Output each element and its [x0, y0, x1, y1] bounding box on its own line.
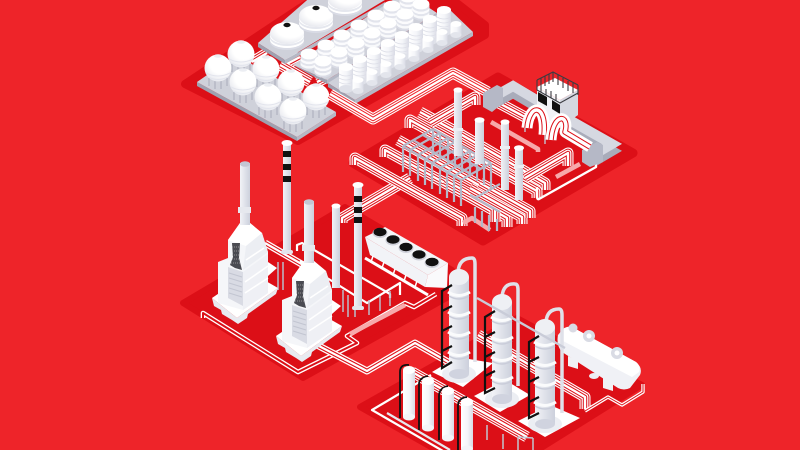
- furnace platform pipes: [203, 243, 450, 372]
- panel: furnace platform: [183, 207, 452, 378]
- air cooler: [365, 227, 448, 295]
- plate: large domed tanks: [258, 0, 385, 64]
- column platform pipes: [372, 335, 643, 450]
- gray connector between towers: [477, 298, 565, 348]
- gray stands under curved pipes: [525, 117, 555, 144]
- plate: cylinders: [328, 6, 473, 104]
- panel: process unit platform: [353, 77, 633, 241]
- panel: column platform: [360, 318, 642, 450]
- plate: medium tanks: [293, 0, 437, 84]
- column tower 3: [528, 309, 562, 433]
- column tower 2: [485, 284, 519, 408]
- horizontal vessel: [558, 324, 641, 391]
- chimney: plain: [332, 204, 340, 288]
- furnace 1: [212, 161, 278, 324]
- panel: storage tank platform: [185, 0, 485, 141]
- pipe rack: [403, 129, 500, 231]
- building: [537, 72, 578, 128]
- furnace 2: [276, 199, 342, 362]
- stacks: [453, 87, 524, 200]
- ducts and control building: [483, 72, 612, 167]
- column tower 1: [442, 258, 476, 383]
- chimney: striped left: [278, 140, 293, 290]
- small pressure vessels: [400, 365, 473, 450]
- curved pipes at building: [527, 110, 590, 147]
- plate: spheres: [197, 40, 336, 141]
- chimney: striped right: [343, 182, 390, 317]
- pipes between tank plates: [252, 53, 338, 82]
- pipe bundle: tanks to process unit: [330, 73, 488, 119]
- tower plates: [432, 357, 580, 437]
- process unit pipes: [342, 97, 596, 230]
